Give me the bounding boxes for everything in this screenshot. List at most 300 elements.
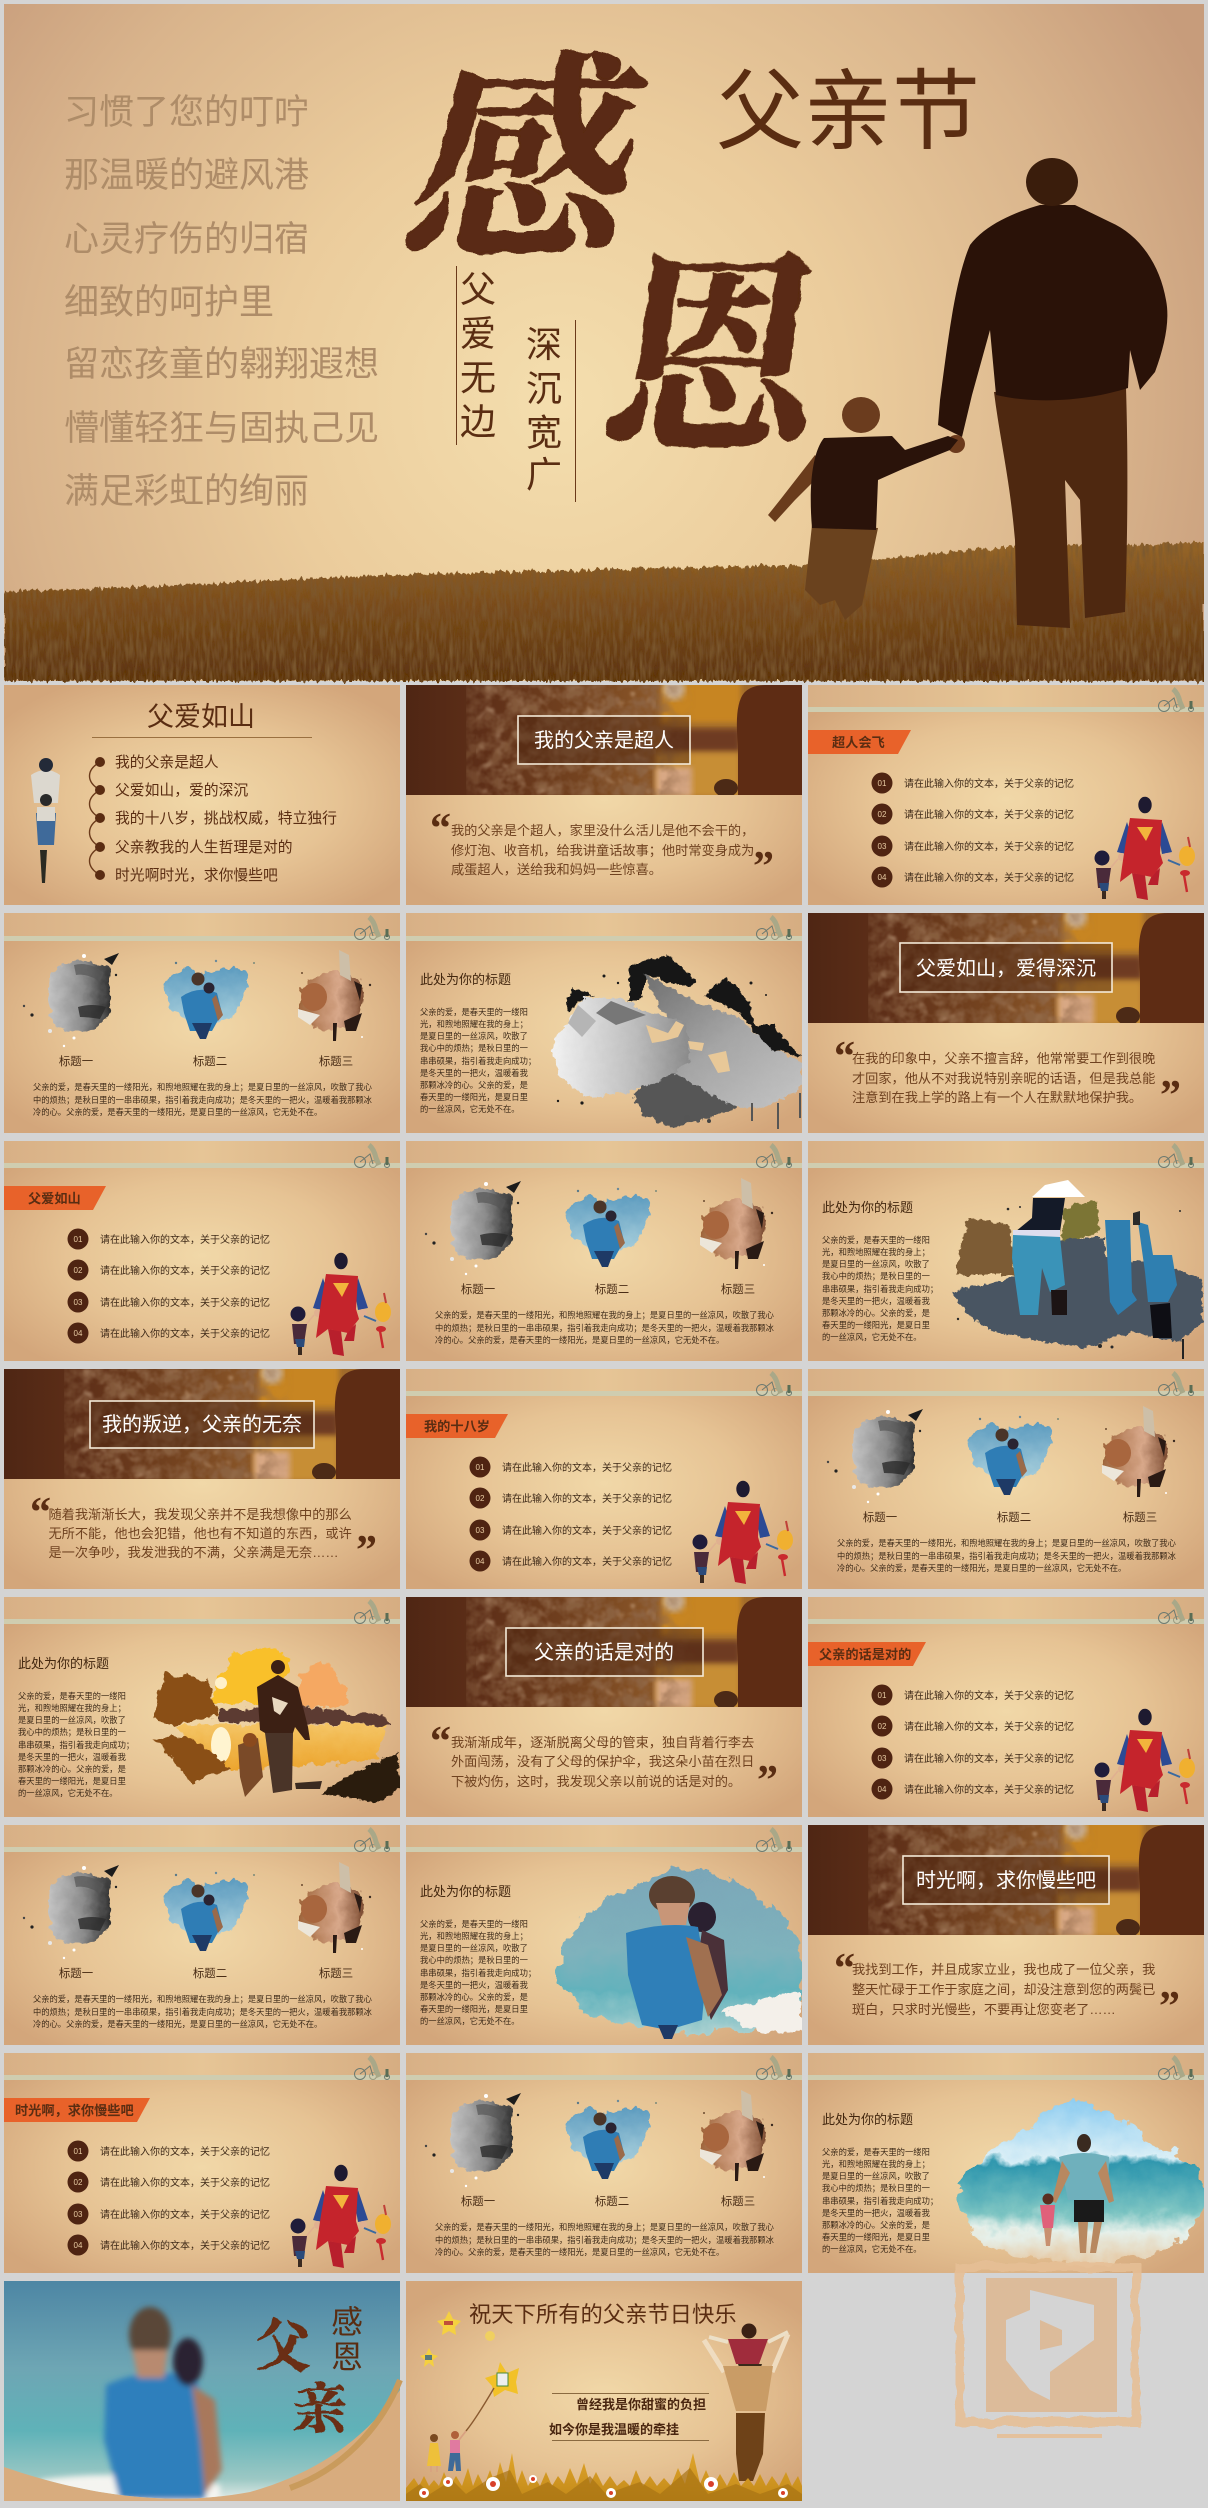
body text: 春天里的一缕阳光，是夏日里	[420, 2004, 528, 2014]
description: 中的烦热；是秋日里的一串串硕果，指引着我走向成功；是冬天里的一把火，温暖着我那颗冰	[33, 1095, 373, 1105]
numbered list: 请在此输入你的文本，关于父亲的记忆	[100, 2239, 270, 2252]
title box	[903, 1856, 1109, 1904]
vertical text left: 边	[460, 401, 496, 442]
quote text: “	[430, 806, 451, 852]
numbered list: 请在此输入你的文本，关于父亲的记忆	[904, 777, 1074, 790]
calligraphy title: gratitude	[385, 0, 862, 497]
title box: 父亲的话是对的	[534, 1641, 674, 1664]
vertical text right: 沉	[526, 368, 562, 409]
calligraphy: father: 父	[255, 2303, 313, 2383]
numbered list: 请在此输入你的文本，关于父亲的记忆	[502, 1555, 672, 1568]
poem text: 细致的呵护里	[64, 283, 274, 322]
panel: slide 父爱如山 outline	[4, 685, 400, 905]
illustration: superhero family	[290, 1253, 391, 1356]
description: 冷的心。父亲的爱，是春天里的一缕阳光，是夏日里的一丝凉风，它无处不在。	[837, 1563, 1126, 1573]
photo captions	[59, 1055, 353, 1068]
ink splash photos	[425, 2090, 773, 2187]
numbered list: 请在此输入你的文本，关于父亲的记忆	[100, 1264, 270, 1277]
body text: 那颗冰冷的心。父亲的爱，是	[822, 1308, 930, 1318]
numbered list: 请在此输入你的文本，关于父亲的记忆	[904, 871, 1074, 884]
banner photo	[406, 1590, 802, 1709]
icon: bicycle	[756, 2057, 792, 2080]
photo captions: 标题一	[461, 1283, 495, 1296]
numbered list: 请在此输入你的文本，关于父亲的记忆	[904, 1689, 1074, 1702]
photo captions: 标题三	[319, 1967, 353, 1980]
vertical text left: 爱	[460, 313, 496, 354]
outline list: 父亲教我的人生哲理是对的	[115, 839, 293, 856]
quote text: ”	[753, 844, 774, 890]
panel: slide 时光啊，求你慢些吧	[808, 1818, 1204, 2045]
icon: bicycle	[1158, 689, 1194, 712]
tag	[4, 2098, 150, 2122]
numbered list: 请在此输入你的文本，关于父亲的记忆	[904, 1752, 1074, 1765]
poem text: 那温暖的避风港	[64, 156, 309, 195]
quote text: “	[30, 1490, 51, 1536]
header band	[4, 2053, 400, 2080]
heading: 祝天下所有的父亲节日快乐	[469, 2302, 737, 2327]
photo captions: 标题三	[319, 1055, 353, 1068]
photo captions: 标题二	[997, 1511, 1031, 1524]
tag: 父爱如山	[28, 1191, 81, 1206]
photo captions: 标题三	[721, 2195, 755, 2208]
body text	[822, 2147, 938, 2254]
description: 父亲的爱，是春天里的一缕阳光，和煦地照耀在我的身上；是夏日里的一丝凉风，吹散了我心	[33, 1082, 372, 1092]
body text: 是冬天里的一把火，温暖着我	[420, 1068, 528, 1078]
icon: bicycle	[354, 917, 390, 940]
calligraphy: father	[255, 2303, 348, 2444]
body text: 春天里的一缕阳光，是夏日里	[822, 1320, 930, 1330]
numbered list: 03	[878, 842, 887, 851]
heading: 此处为你的标题	[420, 1884, 511, 1899]
title box: 父爱如山，爱得深沉	[916, 957, 1096, 980]
icon: bicycle	[1158, 2057, 1194, 2080]
illustration: superhero family	[692, 1481, 793, 1584]
description	[435, 1310, 775, 1345]
panel: slide three photos 2	[406, 1141, 802, 1361]
title box	[518, 716, 690, 764]
icon: wavy timeline	[90, 757, 105, 880]
grass and flowers	[406, 2453, 802, 2501]
vertical text: thanks	[331, 2304, 363, 2375]
greeting lines	[549, 2393, 709, 2441]
photo: holding hands	[552, 955, 802, 1129]
panel: slide 父亲的话是对的 list	[808, 1597, 1204, 1817]
numbered list: 04	[878, 1785, 887, 1794]
body text: 是夏日里的一丝凉风，吹散了	[18, 1715, 126, 1725]
ink splash photos	[425, 1178, 773, 1275]
body text: 光，和煦地照耀在我的身上；	[822, 1247, 930, 1257]
panel: slide hands photo	[406, 913, 802, 1133]
body text: 光，和煦地照耀在我的身上；	[420, 1019, 528, 1029]
child silhouette	[768, 397, 958, 620]
photo: walking legs	[952, 1180, 1203, 1359]
description: 父亲的爱，是春天里的一缕阳光，和煦地照耀在我的身上；是夏日里的一丝凉风，吹散了我心	[33, 1994, 372, 2004]
panel: slide three photos 5	[406, 2053, 802, 2273]
numbered list: 02	[878, 810, 887, 819]
poem text: 心灵疗伤的归宿	[64, 220, 309, 259]
body text: 那颗冰冷的心。父亲的爱，是	[420, 1992, 528, 2002]
numbered list	[872, 772, 1074, 888]
watermark logo	[960, 2267, 1136, 2438]
numbered list: 04	[476, 1557, 485, 1566]
numbered list	[68, 2140, 270, 2256]
body text: 是夏日里的一丝凉风，吹散了	[822, 2171, 930, 2181]
panel: slide sunset photo	[4, 1597, 400, 1817]
body text: 我心中的烦热；是秋日里的一	[822, 1271, 930, 1281]
header band	[406, 1141, 802, 1168]
vertical text right: 深	[526, 324, 562, 365]
panel: slide three photos 3	[808, 1369, 1204, 1589]
photo captions: 标题二	[193, 1055, 227, 1068]
numbered list: 请在此输入你的文本，关于父亲的记忆	[502, 1461, 672, 1474]
panel: slide 父爱如山，爱得深沉	[808, 906, 1204, 1133]
poem text: 满足彩虹的绚丽	[64, 472, 309, 511]
body text: 的一丝凉风，它无处不在。	[822, 2244, 922, 2254]
body text: 串串硕果，指引着我走向成功；	[822, 1284, 938, 1294]
tag	[406, 1414, 508, 1438]
description: 冷的心。父亲的爱，是春天里的一缕阳光，是夏日里的一丝凉风，它无处不在。	[435, 1335, 724, 1345]
poem text: 习惯了您的叮咛	[64, 93, 309, 132]
numbered list: 04	[74, 1329, 83, 1338]
body text: 我心中的烦热；是秋日里的一	[822, 2183, 930, 2193]
panel: slide 父爱如山 list	[4, 1141, 400, 1361]
poem text: 留恋孩童的翱翔遐想	[64, 345, 379, 384]
tag	[4, 1186, 106, 1210]
icon: kite and string	[466, 2362, 519, 2431]
photo captions	[461, 1283, 755, 1296]
header band	[4, 1141, 400, 1168]
photo captions: 标题三	[1123, 1511, 1157, 1524]
body text: 的一丝凉风，它无处不在。	[420, 1104, 520, 1114]
grass field	[4, 542, 1204, 681]
numbered list: 请在此输入你的文本，关于父亲的记忆	[904, 1783, 1074, 1796]
photo captions: 标题二	[595, 1283, 629, 1296]
numbered list: 请在此输入你的文本，关于父亲的记忆	[904, 840, 1074, 853]
panel: slide beach photo	[808, 2053, 1204, 2273]
photo: father carrying child at sea	[561, 1870, 802, 2039]
photo captions: 标题一	[461, 2195, 495, 2208]
quote text: 咸蛋超人，送给我和妈妈一些惊喜。	[451, 862, 662, 877]
body text: 那颗冰冷的心。父亲的爱，是	[822, 2220, 930, 2230]
heading: 此处为你的标题	[822, 1200, 913, 1215]
vertical text right: 广	[526, 454, 562, 495]
description	[33, 1994, 373, 2029]
vertical text left	[456, 266, 496, 445]
header band	[808, 1597, 1204, 1624]
tag: 时光啊，求你慢些吧	[15, 2102, 134, 2118]
quote text: ”	[1160, 1073, 1181, 1119]
heading: 此处为你的标题	[420, 972, 511, 987]
panel: slide 父亲的话是对的	[406, 1590, 802, 1817]
body text: 我心中的烦热；是秋日里的一	[18, 1727, 126, 1737]
quote text: 斑白，只求时光慢些，不要再让您变老了……	[852, 2001, 1116, 2017]
description: 中的烦热；是秋日里的一串串硕果，指引着我走向成功；是冬天里的一把火，温暖着我那颗冰	[435, 1323, 775, 1333]
banner photo	[808, 1818, 1204, 1937]
body text: 串串硕果，指引着我走向成功；	[420, 1056, 536, 1066]
description	[837, 1538, 1177, 1573]
panel: slide blue shirt father photo	[406, 1825, 802, 2045]
photo: sunset father and child	[150, 1647, 400, 1803]
body text: 父亲的爱，是春天里的一缕阳	[822, 2147, 930, 2157]
numbered list	[68, 1228, 270, 1344]
photo captions: 标题一	[863, 1511, 897, 1524]
heading: 此处为你的标题	[822, 2112, 913, 2127]
body text: 那颗冰冷的心。父亲的爱，是	[420, 1080, 528, 1090]
title box: 我的叛逆，父亲的无奈	[102, 1413, 302, 1436]
vertical text right: 宽	[526, 412, 562, 453]
quote text: ”	[757, 1758, 778, 1804]
ink splash photos	[827, 1406, 1175, 1503]
tag	[808, 730, 911, 754]
numbered list: 请在此输入你的文本，关于父亲的记忆	[502, 1524, 672, 1537]
body text: 光，和煦地照耀在我的身上；	[420, 1931, 528, 1941]
panel: slide 我的父亲是超人	[406, 678, 802, 905]
body text: 串串硕果，指引着我走向成功；	[822, 2196, 938, 2206]
numbered list: 01	[74, 2147, 83, 2156]
numbered list: 请在此输入你的文本，关于父亲的记忆	[904, 808, 1074, 821]
illustration: superhero family	[1094, 1709, 1195, 1812]
outline list	[115, 754, 337, 884]
numbered list: 04	[74, 2241, 83, 2250]
numbered list: 01	[878, 1691, 887, 1700]
poem text: 懵懂轻狂与固执己见	[64, 409, 379, 448]
tag: 超人会飞	[832, 734, 885, 750]
icon: bicycle	[354, 1145, 390, 1168]
numbered list: 请在此输入你的文本，关于父亲的记忆	[100, 2145, 270, 2158]
body text	[822, 1235, 938, 1342]
vertical text: thanks: 恩	[331, 2339, 363, 2375]
numbered list	[470, 1456, 672, 1572]
quote text	[430, 1719, 778, 1804]
photo captions: 标题二	[595, 2195, 629, 2208]
banner photo	[808, 906, 1204, 1025]
father silhouette	[938, 158, 1167, 628]
numbered list: 请在此输入你的文本，关于父亲的记忆	[100, 2176, 270, 2189]
panel: slide 我的叛逆，父亲的无奈	[4, 1362, 400, 1589]
photo captions: 标题一	[59, 1055, 93, 1068]
description: 父亲的爱，是春天里的一缕阳光，和煦地照耀在我的身上；是夏日里的一丝凉风，吹散了我心	[435, 2222, 774, 2232]
icon: bicycle	[1158, 1601, 1194, 1624]
quote text: 外面闯荡，没有了父母的保护伞，我这朵小苗在烈日	[451, 1753, 754, 1769]
body text: 春天里的一缕阳光，是夏日里	[822, 2232, 930, 2242]
numbered list: 请在此输入你的文本，关于父亲的记忆	[904, 1720, 1074, 1733]
panel: slide 时光啊 list	[4, 2053, 400, 2273]
title box	[900, 943, 1112, 992]
panel: slide three photos 1	[4, 913, 400, 1133]
vertical text left: 父	[460, 269, 496, 310]
header band	[4, 1597, 400, 1624]
icon: bicycle	[756, 1373, 792, 1396]
quote text: 随着我渐渐长大，我发现父亲并不是我想像中的那么	[48, 1506, 352, 1522]
icon: bicycle	[354, 1829, 390, 1852]
header band	[4, 913, 400, 941]
header band	[406, 1369, 802, 1396]
quote text: 才回家，他从不对我说特别亲昵的话语，但是我总能	[852, 1070, 1155, 1086]
outline list: 父爱如山，爱的深沉	[115, 782, 248, 799]
icon: bicycle	[1158, 1373, 1194, 1396]
body text: 我心中的烦热；是秋日里的一	[420, 1043, 528, 1053]
quote text	[30, 1490, 377, 1574]
icon: bicycle	[354, 1601, 390, 1624]
header band	[406, 1825, 802, 1852]
title box	[506, 1628, 703, 1676]
photo captions: 标题二	[193, 1967, 227, 1980]
vertical text: thanks: 感	[331, 2304, 363, 2340]
banner photo	[406, 678, 802, 797]
quote text: 我的父亲是个超人，家里没什么活儿是他不会干的，	[451, 822, 754, 838]
photo captions: 标题一	[59, 1967, 93, 1980]
panel: closing photo slide	[4, 2281, 400, 2505]
body text: 父亲的爱，是春天里的一缕阳	[18, 1691, 126, 1701]
quote text	[834, 1946, 1180, 2030]
photo captions	[863, 1511, 1157, 1524]
ink splash photos	[23, 950, 371, 1047]
photo: father and child on beach	[958, 2102, 1204, 2264]
heading: 此处为你的标题	[18, 1656, 109, 1671]
header band	[808, 1369, 1204, 1396]
vertical text left: 无	[460, 357, 496, 398]
outline list: 时光啊时光，求你慢些吧	[115, 867, 278, 884]
quote text: ”	[1159, 1984, 1180, 2030]
body text: 串串硕果，指引着我走向成功；	[420, 1968, 536, 1978]
body text: 春天里的一缕阳光，是夏日里	[18, 1776, 126, 1786]
body text: 是冬天里的一把火，温暖着我	[18, 1752, 126, 1762]
body text: 父亲的爱，是春天里的一缕阳	[420, 1919, 528, 1929]
numbered list: 01	[74, 1235, 83, 1244]
panel: slide walking jeans photo	[808, 1141, 1204, 1361]
icon: bicycle	[756, 1145, 792, 1168]
description: 冷的心。父亲的爱，是春天里的一缕阳光，是夏日里的一丝凉风，它无处不在。	[435, 2247, 724, 2257]
quote text: “	[834, 1034, 855, 1080]
title box	[90, 1401, 314, 1448]
outline list: 我的父亲是超人	[115, 754, 219, 771]
header band	[808, 2053, 1204, 2080]
quote text	[834, 1034, 1181, 1119]
body text: 父亲的爱，是春天里的一缕阳	[420, 1007, 528, 1017]
numbered list: 02	[476, 1494, 485, 1503]
tag	[808, 1642, 926, 1666]
quote text: 我渐渐成年，逐渐脱离父母的管束，独自背着行李去	[451, 1734, 754, 1750]
numbered list: 03	[878, 1754, 887, 1763]
numbered list: 请在此输入你的文本，关于父亲的记忆	[100, 1233, 270, 1246]
body text: 光，和煦地照耀在我的身上；	[18, 1703, 126, 1713]
quote text: 是一次争吵，我发泄我的不满，父亲满是无奈……	[48, 1545, 339, 1560]
body text: 我心中的烦热；是秋日里的一	[420, 1955, 528, 1965]
greeting lines: 如今你是我温暖的牵挂	[549, 2422, 679, 2437]
body text: 串串硕果，指引着我走向成功；	[18, 1740, 134, 1750]
title box: 时光啊，求你慢些吧	[916, 1869, 1096, 1892]
body text: 光，和煦地照耀在我的身上；	[822, 2159, 930, 2169]
numbered list: 请在此输入你的文本，关于父亲的记忆	[502, 1492, 672, 1505]
quote text: 注意到在我上学的路上有一个人在默默地保护我。	[852, 1089, 1142, 1105]
header band	[406, 913, 802, 941]
description: 中的烦热；是秋日里的一串串硕果，指引着我走向成功；是冬天里的一把火，温暖着我那颗冰	[837, 1551, 1177, 1561]
illustration: father carrying child	[704, 2324, 788, 2481]
illustration: superhero family	[1094, 797, 1195, 900]
numbered list: 03	[74, 2210, 83, 2219]
body text: 是冬天里的一把火，温暖着我	[822, 2208, 930, 2218]
banner photo	[4, 1362, 400, 1481]
outline list: 我的十八岁，挑战权威，特立独行	[115, 810, 337, 827]
icon: father and child on bike	[31, 758, 60, 883]
ink splash photos	[23, 1862, 371, 1959]
numbered list: 03	[74, 1298, 83, 1307]
photo captions: 标题三	[721, 1283, 755, 1296]
body text: 的一丝凉风，它无处不在。	[822, 1332, 922, 1342]
panel: slide three photos 4	[4, 1825, 400, 2045]
quote text: “	[430, 1719, 451, 1765]
numbered list: 02	[878, 1722, 887, 1731]
panel: hero cover	[4, 0, 1204, 681]
photo: blurred father and child	[4, 2281, 400, 2505]
icon: bicycle	[354, 2057, 390, 2080]
body text: 是夏日里的一丝凉风，吹散了	[822, 1259, 930, 1269]
body text: 是冬天里的一把火，温暖着我	[822, 1296, 930, 1306]
header band	[808, 1141, 1204, 1168]
panel: slide 超人会飞	[808, 685, 1204, 905]
quote text: 无所不能，他也会犯错，他也有不知道的东西，或许	[48, 1525, 352, 1541]
numbered list: 02	[74, 1266, 83, 1275]
body text: 春天里的一缕阳光，是夏日里	[420, 1092, 528, 1102]
outline heading: 父爱如山	[147, 702, 255, 732]
calligraphy: father: 亲	[293, 2367, 348, 2444]
body text: 是冬天里的一把火，温暖着我	[420, 1980, 528, 1990]
quote text: ”	[356, 1528, 377, 1574]
heading: Father's Day: 父亲节	[716, 62, 980, 161]
photo captions	[59, 1967, 353, 1980]
description: 中的烦热；是秋日里的一串串硕果，指引着我走向成功；是冬天里的一把火，温暖着我那颗冰	[33, 2007, 373, 2017]
icons: stars	[420, 2311, 495, 2367]
numbered list: 请在此输入你的文本，关于父亲的记忆	[100, 2208, 270, 2221]
quote text	[430, 806, 774, 890]
numbered list	[872, 1684, 1074, 1800]
numbered list: 请在此输入你的文本，关于父亲的记忆	[100, 1327, 270, 1340]
header band	[406, 2053, 802, 2080]
body text: 那颗冰冷的心。父亲的爱，是	[18, 1764, 126, 1774]
quote text: 整天忙碌于工作于家庭之间，却没注意到您的两鬓已	[852, 1981, 1155, 1997]
quote text: 我找到工作，并且成家立业，我也成了一位父亲，我	[852, 1961, 1155, 1977]
description	[435, 2222, 775, 2257]
title box: 我的父亲是超人	[534, 729, 674, 752]
illustration: children	[427, 2431, 466, 2472]
panel: slide 我的十八岁	[406, 1369, 802, 1589]
numbered list: 04	[878, 873, 887, 882]
numbered list: 01	[476, 1463, 485, 1472]
panel: closing greeting slide	[406, 2281, 802, 2501]
body text: 是夏日里的一丝凉风，吹散了	[420, 1943, 528, 1953]
illustration: superhero family	[290, 2165, 391, 2268]
quote text: 修灯泡、收音机，给我讲童话故事；他时常变身成为	[451, 842, 754, 859]
numbered list: 02	[74, 2178, 83, 2187]
numbered list: 01	[878, 779, 887, 788]
numbered list: 请在此输入你的文本，关于父亲的记忆	[100, 1296, 270, 1309]
icon: bicycle	[1158, 1145, 1194, 1168]
greeting lines: 曾经我是你甜蜜的负担	[576, 2397, 706, 2412]
poem text	[64, 93, 379, 511]
body text: 父亲的爱，是春天里的一缕阳	[822, 1235, 930, 1245]
description: 父亲的爱，是春天里的一缕阳光，和煦地照耀在我的身上；是夏日里的一丝凉风，吹散了我心	[837, 1538, 1176, 1548]
body text: 是夏日里的一丝凉风，吹散了	[420, 1031, 528, 1041]
quote text: 下被灼伤，这时，我发现父亲以前说的话是对的。	[451, 1773, 741, 1789]
quote text: 在我的印象中，父亲不擅言辞，他常常要工作到很晚	[852, 1050, 1155, 1066]
calligraphy title: gratitude: 恩	[587, 186, 862, 497]
tag: 我的十八岁	[424, 1418, 490, 1434]
body text: 的一丝凉风，它无处不在。	[420, 2016, 520, 2026]
body text	[420, 1007, 536, 1114]
icon: bicycle	[756, 917, 792, 940]
vertical text right	[526, 320, 576, 502]
description: 冷的心。父亲的爱，是春天里的一缕阳光，是夏日里的一丝凉风，它无处不在。	[33, 2019, 322, 2029]
